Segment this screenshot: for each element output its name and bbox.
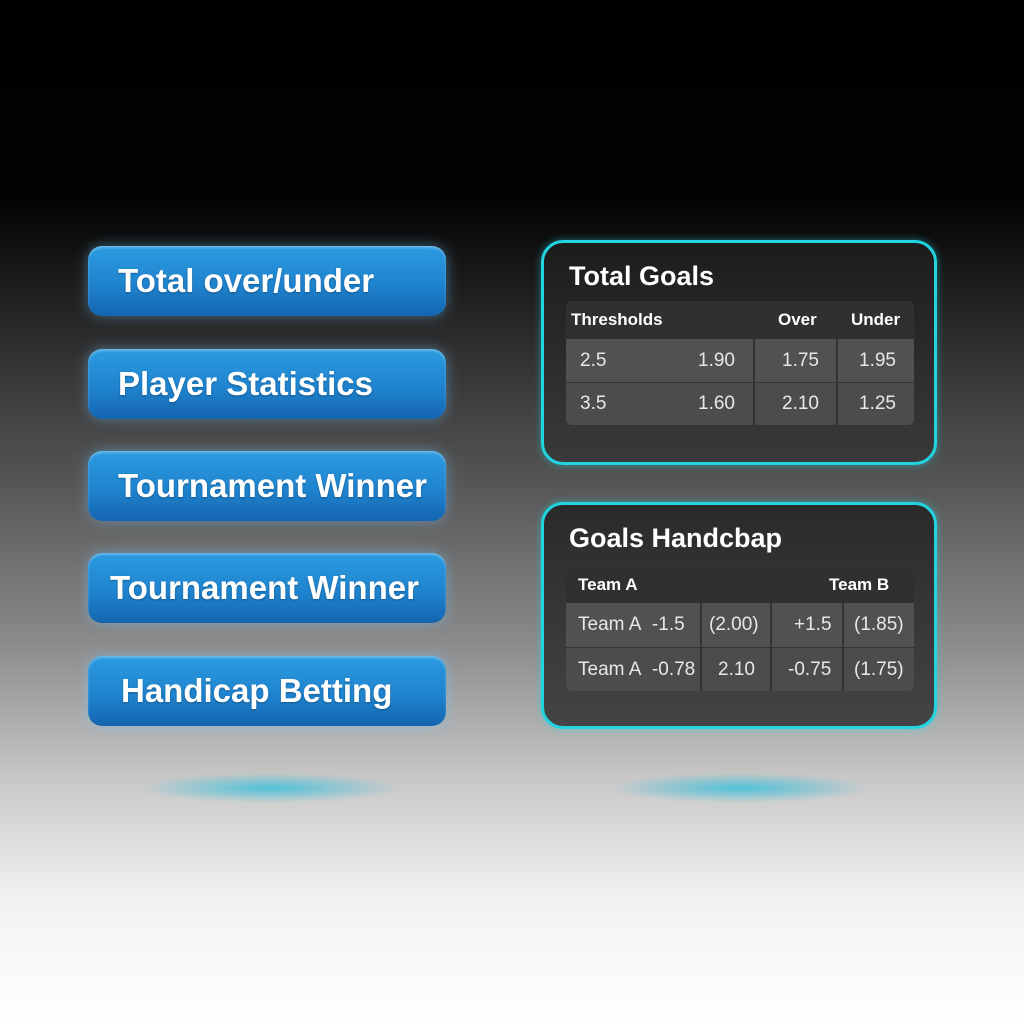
table: handicap: Team A -1.5 <box>578 614 685 635</box>
table: handicap: Team B <box>829 575 889 594</box>
button: Total over/under <box>88 246 446 316</box>
table: total goals: Thresholds <box>571 310 663 329</box>
table: total goals: 1.60 <box>698 393 735 414</box>
panel: Total Goals <box>541 240 937 465</box>
table: total goals: Over <box>778 310 817 329</box>
button: Tournament Winner <box>88 451 446 521</box>
button: Handicap Betting: Handicap Betting <box>121 672 392 709</box>
table: handicap: (1.75) <box>854 659 904 680</box>
glow right <box>610 773 870 803</box>
table: total goals: Under <box>851 310 900 329</box>
table: handicap: -0.75 <box>788 659 831 680</box>
table: handicap <box>566 567 914 691</box>
table: total goals: 2.10 <box>782 393 819 414</box>
table: handicap: 2.10 <box>718 659 755 680</box>
table: total goals: 2.5 <box>580 350 606 371</box>
panel: Goals Handicap <box>541 502 937 729</box>
button: Total over/under: Total over/under <box>118 262 374 299</box>
button: Tournament Winner: Tournament Winner <box>118 467 427 504</box>
button: Tournament Winner 2 <box>88 553 446 623</box>
button: Tournament Winner 2: Tournament Winner <box>110 569 419 606</box>
table: total goals <box>566 301 914 425</box>
table: total goals: 1.90 <box>698 350 735 371</box>
table: handicap: Team A -0.78 <box>578 659 695 680</box>
button: Player Statistics <box>88 349 446 419</box>
table: handicap: Team A <box>578 575 638 594</box>
table: handicap: +1.5 <box>794 614 832 635</box>
glow left <box>140 773 400 803</box>
button: Player Statistics: Player Statistics <box>118 365 373 402</box>
table: handicap: (2.00) <box>709 614 759 635</box>
table: total goals: 1.75 <box>782 350 819 371</box>
button: Handicap Betting <box>88 656 446 726</box>
heading: Goals Handcbap: Goals Handcbap <box>569 523 782 553</box>
table: total goals: 1.95 <box>859 350 896 371</box>
heading: Total Goals: Total Goals <box>569 261 714 291</box>
table: handicap: (1.85) <box>854 614 904 635</box>
table: total goals: 1.25 <box>859 393 896 414</box>
table: total goals: 3.5 <box>580 393 606 414</box>
